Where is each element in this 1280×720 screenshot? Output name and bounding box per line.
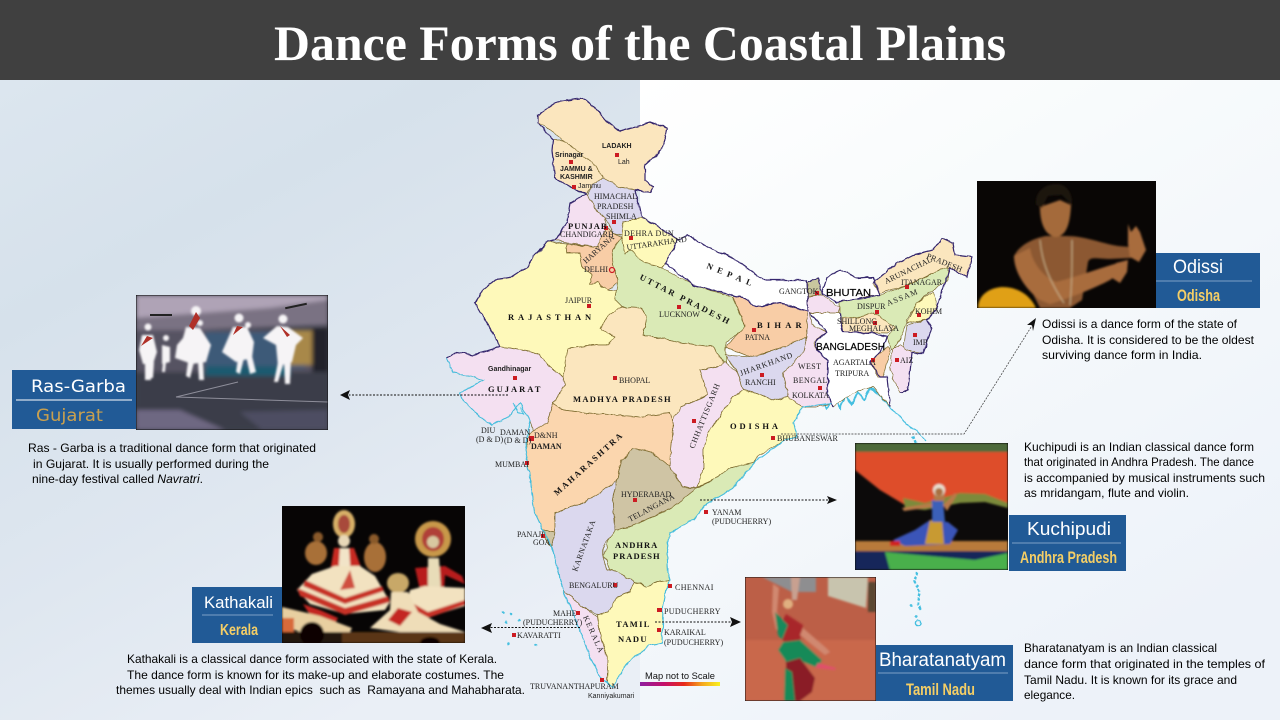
- map labels: NADU: [618, 634, 648, 644]
- text: Ras-Garba description: in Gujarat. It is usually performed during the: [33, 457, 269, 471]
- map labels: UTTAR PRADESH: [638, 272, 733, 327]
- map labels: LADAKH: [602, 143, 632, 150]
- map labels: BHUBANESWAR: [777, 434, 839, 443]
- map labels: RAJASTHAN: [508, 312, 595, 322]
- map labels: ITANAGAR: [901, 278, 943, 287]
- map labels: JHARKHAND: [739, 350, 794, 378]
- map labels: NEPAL: [705, 261, 758, 290]
- map labels: ANDHRA: [615, 540, 658, 550]
- map labels: DELHI: [584, 265, 608, 274]
- map labels: PRADESH: [597, 202, 634, 211]
- coastline: [447, 358, 832, 687]
- map labels: DISPUR: [857, 302, 886, 311]
- map labels: [476, 143, 964, 700]
- text: Bharatanatyam description: Bharatanatyam is an Indian classical: [1024, 641, 1217, 655]
- panel: Kuchipudi: [855, 440, 1265, 571]
- coastline and rivers outside the land: [503, 377, 927, 646]
- text: Bharatanatyam description: Tamil Nadu. It is known for its grace and: [1024, 673, 1237, 687]
- map labels: PRADESH: [925, 252, 964, 274]
- map labels: MAHARASHTRA: [552, 430, 626, 497]
- map labels: Gandhinagar: [488, 366, 531, 373]
- map labels: DAMAN: [531, 442, 562, 451]
- capital markers: [512, 153, 921, 682]
- arrow: Gujarat to Ras-Garba: [340, 390, 508, 400]
- text: Kuchipudi description: is accompanied by musical instruments such: [1024, 471, 1265, 485]
- text: Kathakali description: The dance form is known for its make-up and elaborate costumes. The: [127, 668, 504, 682]
- map labels: ARUNACHAL: [883, 255, 934, 286]
- map labels: (PUDUCHERRY): [712, 517, 771, 526]
- map labels: UTTARAKHAND: [626, 235, 688, 252]
- map labels: AGARTALA: [833, 358, 876, 367]
- map labels: JAMMU &: [560, 166, 593, 173]
- map labels: BENGAL: [793, 376, 828, 385]
- title: Dance Forms of the Coastal Plains: [274, 15, 1006, 71]
- map labels: CHENNAI: [675, 583, 714, 592]
- map labels: TAMIL: [616, 619, 651, 629]
- map labels: D&NH: [534, 431, 558, 440]
- map labels: SHILLONG: [837, 317, 877, 326]
- state shapes: [447, 98, 972, 687]
- map labels: KARNATAKA: [570, 518, 598, 573]
- map labels: MEGHALAYA: [849, 324, 899, 333]
- text: Odissi description: [1042, 317, 1255, 362]
- map labels: MAHE: [553, 609, 577, 618]
- map labels: CHHATTISGARH: [688, 382, 722, 450]
- panel: Bharatanatyam: [745, 577, 1266, 702]
- map labels: YANAM: [712, 508, 741, 517]
- map labels: PUNJAB: [568, 221, 608, 231]
- photo: Odissi dancer: [977, 181, 1156, 308]
- text: Bharatanatyam description: elegance.: [1024, 688, 1075, 702]
- text: Ras-Garba description: nine-day festival called Navratri.: [32, 472, 203, 486]
- label: Ras-Garba, Gujarat: Ras-Garba: [31, 377, 126, 397]
- map labels: KOHIM: [915, 307, 942, 316]
- label: Bharatanatyam, Tamil Nadu: Tamil Nadu: [906, 680, 975, 699]
- map of India: [447, 98, 972, 700]
- map labels: BENGALURU: [569, 581, 619, 590]
- ceiling fans: [150, 303, 307, 316]
- arrow: Kerala to Kathakali: [481, 623, 580, 633]
- map labels: RANCHI: [745, 378, 776, 387]
- text: Bharatanatyam description: [1024, 641, 1266, 702]
- label: Kuchipudi, Andhra Pradesh: Kuchipudi: [1027, 519, 1111, 539]
- map labels: GOA: [533, 538, 551, 547]
- text: Kuchipudi description: as mridangam, flute and violin.: [1024, 486, 1189, 500]
- map labels: TRIPURA: [835, 369, 869, 378]
- label: Bharatanatyam, Tamil Nadu: Bharatanatyam: [879, 650, 1006, 671]
- photo: Bharatanatyam dancer: [745, 577, 876, 701]
- map labels: HYDERABAD: [621, 490, 671, 499]
- map labels: HARYANA: [581, 233, 616, 265]
- map labels: MADHYA PRADESH: [573, 394, 672, 404]
- map labels: KAVARATTI: [517, 631, 561, 640]
- photo: Ras-Garba dancers: [136, 295, 328, 430]
- map labels: LUCKNOW: [659, 310, 700, 319]
- text: Odissi description: surviving dance form in India.: [1042, 348, 1202, 362]
- label: Odissi, Odisha: Odissi: [1173, 257, 1223, 278]
- text: Kuchipudi description: [1024, 440, 1265, 500]
- map labels: HIMACHAL: [594, 192, 637, 201]
- map labels: GUJARAT: [488, 384, 542, 394]
- map labels: TELANGANA: [627, 492, 676, 524]
- map labels: (D & D): [476, 435, 503, 444]
- map labels: GANGTOK: [779, 287, 819, 296]
- map labels: MUMBAI: [495, 460, 529, 469]
- text: Kuchipudi description: that originated in Andhra Pradesh. The dance: [1024, 455, 1254, 469]
- map labels: BHOPAL: [619, 376, 650, 385]
- label: Kuchipudi, Andhra Pradesh: [1009, 515, 1126, 571]
- map labels: KERALA: [581, 614, 606, 655]
- map labels: BANGLADESH: [816, 341, 885, 353]
- text: Kathakali description: themes usually deal with Indian epics such as Ramayana and Mahabharata.: [116, 683, 525, 697]
- map labels: BIHAR: [757, 320, 806, 330]
- text: Ras-Garba description: [28, 441, 316, 486]
- map labels: BHUTAN: [826, 287, 871, 299]
- scale note: [640, 671, 720, 686]
- map labels: (PUDUCHERRY): [664, 638, 723, 647]
- photo: Kathakali performers: [282, 506, 465, 649]
- map labels: AIZ: [900, 356, 913, 365]
- map labels: ODISHA: [730, 421, 781, 431]
- map labels: (D & D): [504, 436, 531, 445]
- panel: Kathakali: [116, 506, 525, 697]
- text: Kathakali description: Kathakali is a classical dance form associated with the state of Kerala.: [127, 652, 497, 666]
- map labels: Jammu: [578, 183, 601, 190]
- label: Kathakali, Kerala: Kathakali: [204, 593, 273, 612]
- text: Kathakali description: [116, 652, 525, 697]
- map labels: Srinagar: [555, 152, 584, 159]
- map labels: KOLKATA: [792, 391, 829, 400]
- arrow: Odisha to Odissi: [781, 318, 1036, 434]
- photo: Kuchipudi dancer: [855, 443, 1008, 570]
- map labels: Lah: [618, 159, 630, 166]
- map labels: Kanniyakumari: [588, 693, 635, 700]
- text: Odissi description: Odissi is a dance form of the state of: [1042, 317, 1238, 331]
- map labels: IMP: [913, 338, 928, 347]
- map labels: TRUVANANTHAPURAM: [530, 682, 619, 691]
- map labels: PATNA: [745, 333, 770, 342]
- text: Kuchipudi description: Kuchipudi is an Indian classical dance form: [1024, 440, 1254, 454]
- panel: Ras-Garba: [12, 295, 328, 486]
- label: Kathakali, Kerala: Kerala: [220, 622, 258, 639]
- label: Ras-Garba, Gujarat: [12, 370, 136, 429]
- label: Odissi, Odisha: Odisha: [1177, 286, 1220, 305]
- map labels: KARAIKAL: [664, 628, 706, 637]
- map labels: KASHMIR: [560, 174, 593, 181]
- map labels: DEHRA DUN: [624, 229, 674, 238]
- label: Kathakali, Kerala: [192, 587, 282, 643]
- map labels: DIU: [481, 426, 495, 435]
- panel: Odissi: [977, 181, 1260, 362]
- map labels: DAMAN: [500, 428, 530, 437]
- map labels: SHIMLA: [606, 212, 637, 221]
- label: Kuchipudi, Andhra Pradesh: Andhra Pradesh: [1020, 548, 1117, 567]
- text: Odissi description: Odisha. It is considered to be the oldest: [1042, 333, 1255, 347]
- text: Bharatanatyam description: dance form that originated in the temples of: [1024, 657, 1266, 671]
- map labels: PRADESH: [613, 551, 661, 561]
- scale note: Map not to Scale: [645, 671, 715, 682]
- arrow: Andhra Pradesh to Kuchipudi: [700, 496, 837, 504]
- label: Odissi, Odisha: [1156, 253, 1260, 308]
- map labels: ASSAM: [885, 287, 920, 308]
- map labels: CHANDIGARH: [560, 230, 614, 239]
- title bar: [0, 0, 1280, 80]
- map labels: PUDUCHERRY: [664, 607, 721, 616]
- map labels: PANAJI: [517, 530, 544, 539]
- label: Bharatanatyam, Tamil Nadu: [876, 645, 1013, 701]
- map labels: (PUDUCHERRY): [523, 618, 582, 627]
- map labels: WEST: [798, 362, 821, 371]
- map labels: JAIPUR: [565, 296, 593, 305]
- text: Ras-Garba description: Ras - Garba is a traditional dance form that originated: [28, 441, 316, 455]
- international border: [447, 98, 972, 407]
- arrow: Tamil Nadu to Bharatanatyam: [655, 617, 741, 627]
- label: Ras-Garba, Gujarat: Gujarat: [36, 406, 103, 426]
